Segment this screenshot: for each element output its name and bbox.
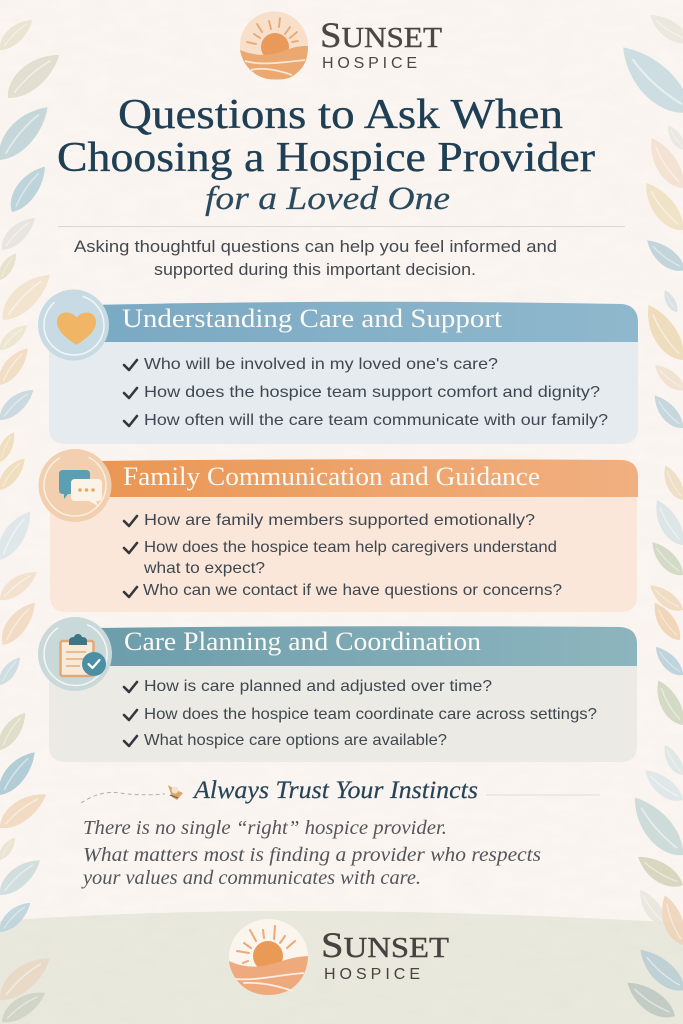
checklist: How does the hospice team support comfort and dignity? [144, 384, 600, 401]
checklist: How often will the care team communicate with our family? [144, 412, 608, 429]
footer logo [229, 919, 449, 995]
checklist: what to expect? [143, 560, 265, 577]
left leaf border [0, 13, 66, 1024]
heading: Family Communication and Guidance [123, 462, 540, 491]
panel body [49, 664, 637, 762]
callout: always trust your instincts [81, 777, 600, 889]
title: Questions to Ask When [118, 92, 563, 138]
top logo [240, 12, 442, 80]
panel body [50, 495, 637, 612]
checklist: How does the hospice team help caregivers understand [144, 539, 557, 556]
title: for a Loved One [205, 181, 450, 217]
heading: Understanding Care and Support [122, 304, 503, 333]
heading: Care Planning and Coordination [124, 627, 481, 656]
checklist [124, 678, 597, 749]
intro text: supported during this important decision. [154, 261, 476, 279]
checklist [124, 512, 562, 599]
checklist: How are family members supported emotionally? [144, 512, 535, 529]
wordmark subtitle: HOSPICE [324, 966, 420, 983]
checklist [124, 356, 608, 429]
icon: butterfly [168, 785, 183, 800]
checklist: Who will be involved in my loved one's care? [144, 356, 498, 373]
checklist: How does the hospice team coordinate care across settings? [144, 706, 597, 723]
icon: sunset emblem [229, 919, 308, 995]
wordmark subtitle: HOSPICE [322, 55, 417, 72]
header band [90, 626, 637, 666]
title: Choosing a Hospice Provider [57, 135, 595, 181]
panel: care planning and coordination [38, 617, 637, 762]
wordmark: SUNSET [321, 925, 449, 965]
callout text: your values and communicates with care. [81, 867, 421, 889]
icon: chat bubbles [38, 449, 112, 522]
dashed flight path [81, 792, 165, 803]
icon: heart [38, 290, 109, 360]
title [57, 92, 595, 217]
callout heading: Always Trust Your Instincts [192, 777, 478, 804]
icon: sunset emblem [240, 12, 308, 80]
callout text: What matters most is finding a provider who respects [83, 844, 541, 866]
header band [90, 459, 638, 498]
callout text: There is no single “right” hospice provider. [83, 817, 447, 839]
intro text: Asking thoughtful questions can help you feel informed and [74, 238, 557, 256]
callout text [81, 817, 541, 889]
checklist: What hospice care options are available? [144, 732, 447, 749]
header band [90, 302, 638, 342]
panel: understanding care and support [38, 290, 638, 444]
checklist: How is care planned and adjusted over time? [144, 678, 492, 695]
panel body [49, 340, 638, 444]
wordmark: SUNSET [320, 15, 442, 55]
right leaf border [610, 9, 683, 1024]
panel: family communication and guidance [38, 449, 638, 612]
checklist: Who can we contact if we have questions or concerns? [143, 582, 562, 599]
icon: clipboard with check [38, 617, 112, 691]
intro text [74, 238, 557, 279]
footer wash [0, 911, 683, 1024]
